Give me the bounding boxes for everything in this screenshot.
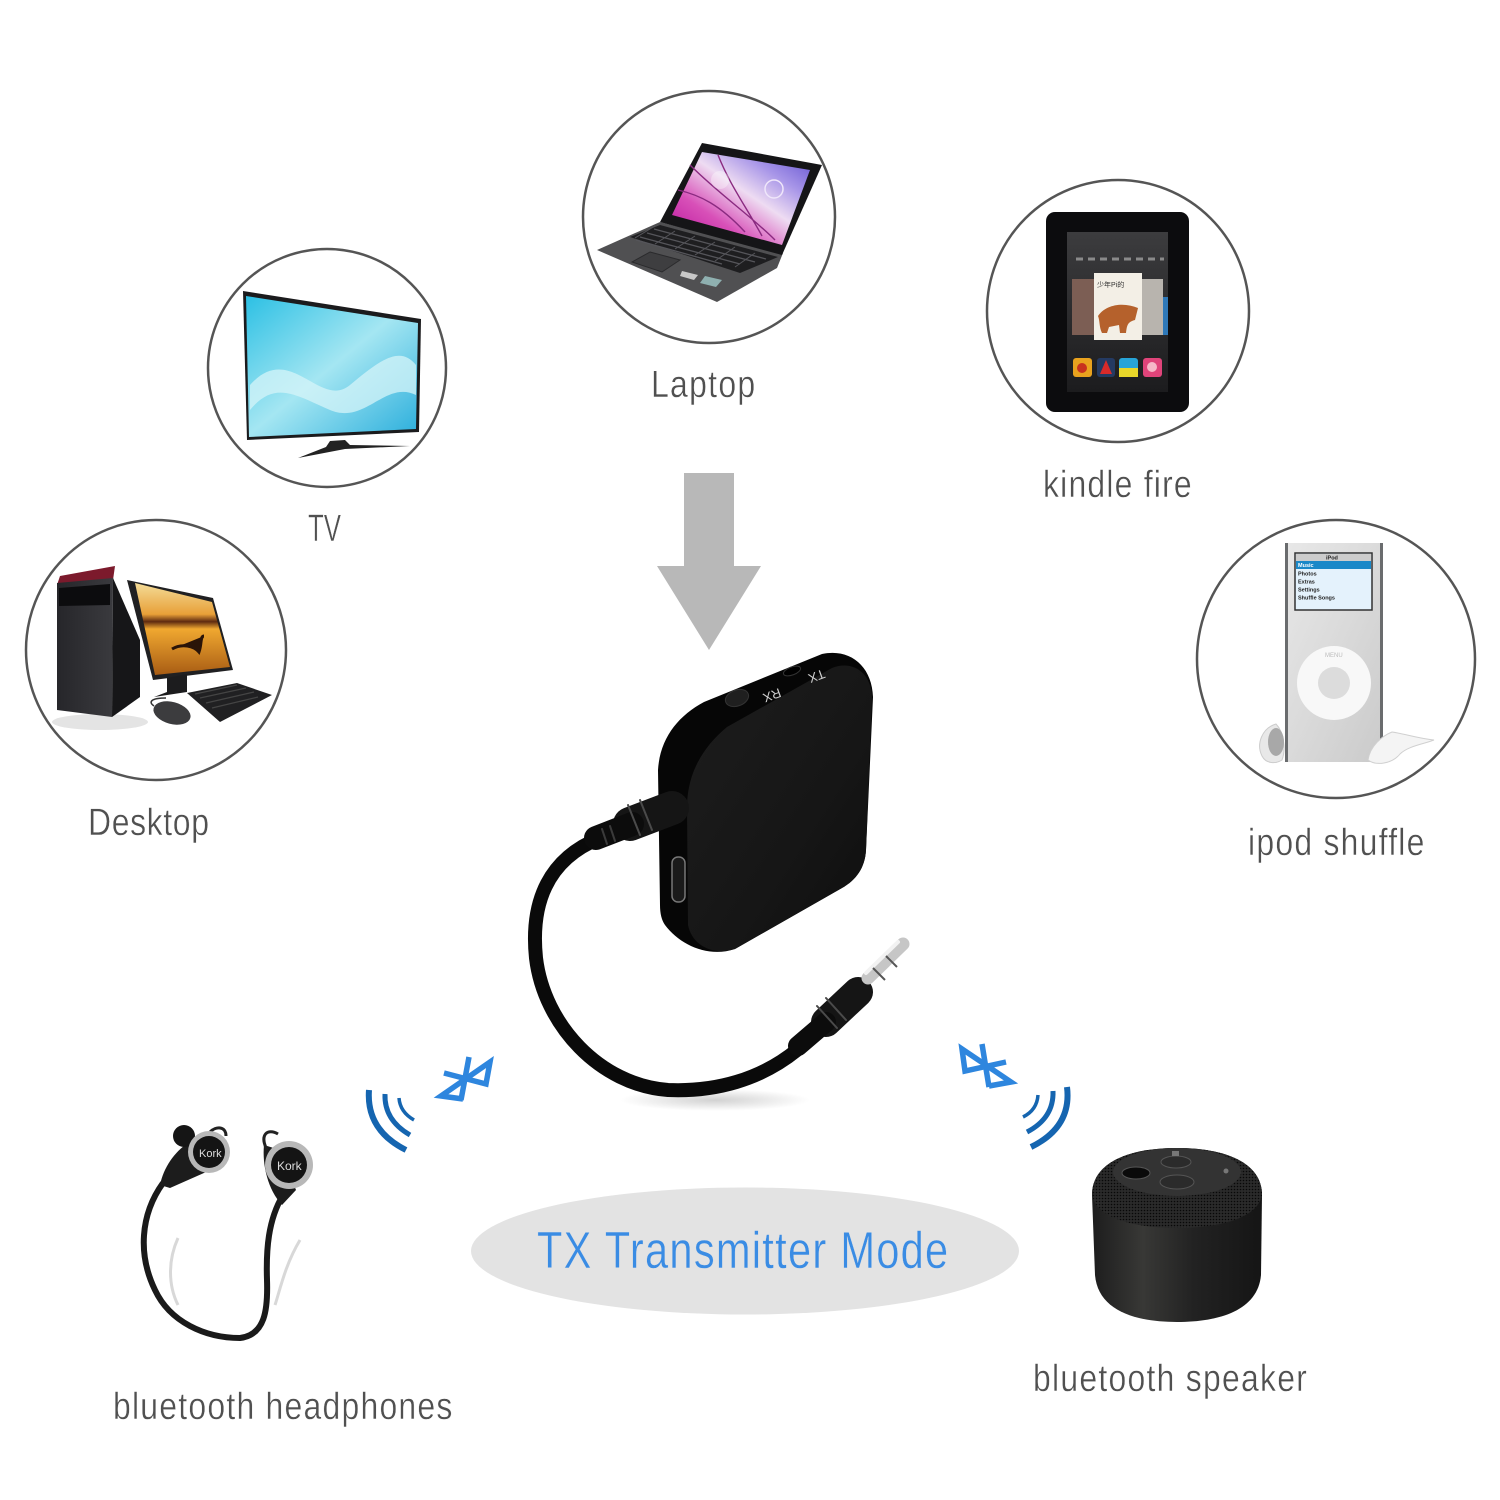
icon: TV bbox=[243, 291, 421, 458]
USB port bbox=[672, 857, 685, 902]
label: Laptop: Laptop bbox=[651, 363, 755, 406]
icon: desktop computer bbox=[52, 566, 272, 730]
callout text: TX Transmitter Mode bbox=[537, 1221, 948, 1279]
power button bbox=[723, 686, 751, 710]
transmitter body bbox=[658, 653, 873, 952]
panel: bluetooth speaker bbox=[1033, 1148, 1307, 1400]
upper connector bbox=[596, 800, 672, 844]
panel: TV bbox=[208, 249, 446, 550]
cable bbox=[535, 838, 797, 1090]
callout: TX Transmitter Mode bbox=[471, 1188, 1019, 1314]
label: ipod shuffle: ipod shuffle bbox=[1248, 821, 1424, 864]
icon: iPod bbox=[1260, 543, 1434, 763]
earbud logo right: Kork bbox=[277, 1159, 303, 1173]
panel: Desktop bbox=[26, 520, 286, 844]
wheel text: MENU bbox=[1325, 653, 1343, 659]
icon: signal waves right bbox=[1023, 1087, 1068, 1147]
Kindle circle bbox=[987, 180, 1249, 442]
icon: tablet bbox=[1046, 212, 1189, 412]
device: Bluetooth transmitter bbox=[535, 653, 903, 1111]
earbud logo left: Kork bbox=[199, 1148, 222, 1160]
panel: iPod bbox=[1197, 520, 1475, 864]
iPod menu text: Extras bbox=[1298, 580, 1315, 586]
audio port bbox=[782, 664, 802, 678]
label: bluetooth headphones: bluetooth headphones bbox=[113, 1385, 452, 1428]
icon: headphones bbox=[144, 1125, 313, 1338]
TV circle bbox=[208, 249, 446, 487]
iPod menu text: Photos bbox=[1298, 572, 1317, 578]
icon: Bluetooth right bbox=[962, 1044, 1011, 1087]
icon: laptop bbox=[597, 143, 822, 302]
book title: 少年Pi的 bbox=[1097, 280, 1124, 289]
callout ellipse bbox=[471, 1188, 1019, 1314]
icon: Bluetooth left bbox=[441, 1057, 490, 1100]
label: bluetooth speaker: bluetooth speaker bbox=[1033, 1357, 1307, 1400]
iPod menu text: Music bbox=[1298, 563, 1314, 569]
cable shadows bbox=[170, 1238, 300, 1305]
label: kindle fire: kindle fire bbox=[1043, 463, 1192, 506]
RX label: RX bbox=[761, 685, 783, 706]
iPod menu text bbox=[1298, 556, 1338, 602]
label: TV: TV bbox=[308, 508, 341, 550]
iPod circle bbox=[1197, 520, 1475, 798]
iPod menu text: iPod bbox=[1326, 556, 1338, 562]
front face bbox=[687, 666, 872, 951]
arrow: down bbox=[657, 473, 761, 650]
panel: laptop bbox=[583, 91, 835, 406]
laptop circle bbox=[583, 91, 835, 343]
Desktop circle bbox=[26, 520, 286, 780]
iPod menu text: Shuffle Songs bbox=[1298, 596, 1335, 602]
TX label: TX bbox=[806, 666, 827, 686]
label: Desktop: Desktop bbox=[88, 801, 209, 844]
iPod menu text: Settings bbox=[1298, 588, 1320, 594]
panel: Kindle Fire bbox=[987, 180, 1249, 506]
icon: signal waves left bbox=[369, 1090, 414, 1150]
jack connector bbox=[798, 942, 903, 1046]
shadow bbox=[620, 1089, 810, 1111]
panel: bluetooth headphones bbox=[113, 1125, 452, 1428]
icon: speaker bbox=[1092, 1148, 1262, 1322]
